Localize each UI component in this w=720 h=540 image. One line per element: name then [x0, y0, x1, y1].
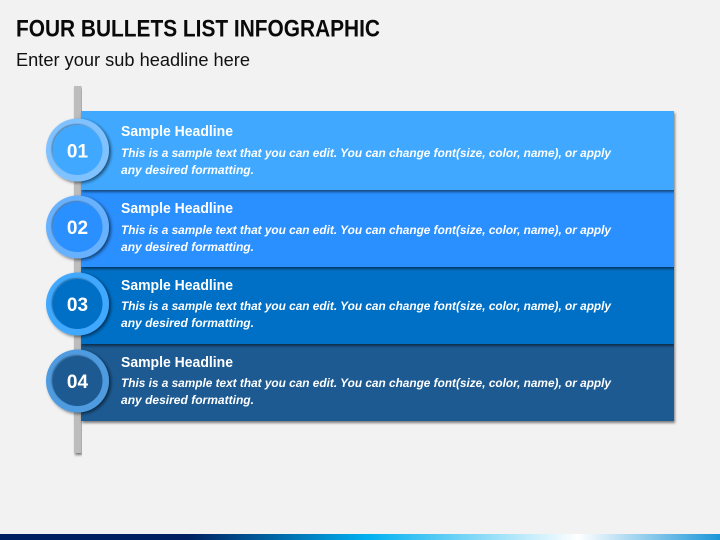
body text 3	[121, 299, 612, 330]
body text 3: This is a sample text that you can edit. You can change font(size, color, name), or apply	[121, 299, 612, 313]
headline 4: Sample Headline	[121, 355, 233, 371]
badge 04	[46, 350, 109, 412]
body text 1	[121, 146, 612, 177]
headline 2: Sample Headline	[121, 201, 233, 217]
badge 03: 03	[67, 295, 88, 316]
body text 4	[121, 376, 612, 407]
panel: item 4	[81, 344, 674, 421]
body text 3: any desired formatting.	[121, 316, 254, 330]
badge 04: 04	[67, 372, 88, 393]
body text 4: any desired formatting.	[121, 393, 254, 407]
badge 02	[46, 196, 109, 258]
body text 2	[121, 223, 612, 254]
panel: item 1	[81, 111, 674, 190]
body text 1: any desired formatting.	[121, 163, 254, 177]
badge 02: 02	[67, 218, 88, 239]
panel: item 2	[81, 190, 674, 267]
body text 4: This is a sample text that you can edit. You can change font(size, color, name), or apply	[121, 376, 612, 390]
headline 1: Sample Headline	[121, 124, 233, 140]
badge 01: 01	[67, 142, 88, 162]
vertical timeline pole	[74, 86, 82, 453]
subtitle: Enter your sub headline here	[16, 50, 250, 70]
body text 2: This is a sample text that you can edit. You can change font(size, color, name), or apply	[121, 223, 612, 237]
body text 2: any desired formatting.	[121, 240, 254, 254]
body text 1: This is a sample text that you can edit. You can change font(size, color, name), or apply	[121, 146, 612, 160]
panel: item 3	[81, 267, 674, 344]
badge 03	[46, 272, 109, 336]
badge 01	[46, 118, 109, 182]
title: FOUR BULLETS LIST INFOGRAPHIC	[16, 16, 380, 42]
headline 3: Sample Headline	[121, 278, 233, 294]
footer gradient strip	[0, 534, 720, 540]
